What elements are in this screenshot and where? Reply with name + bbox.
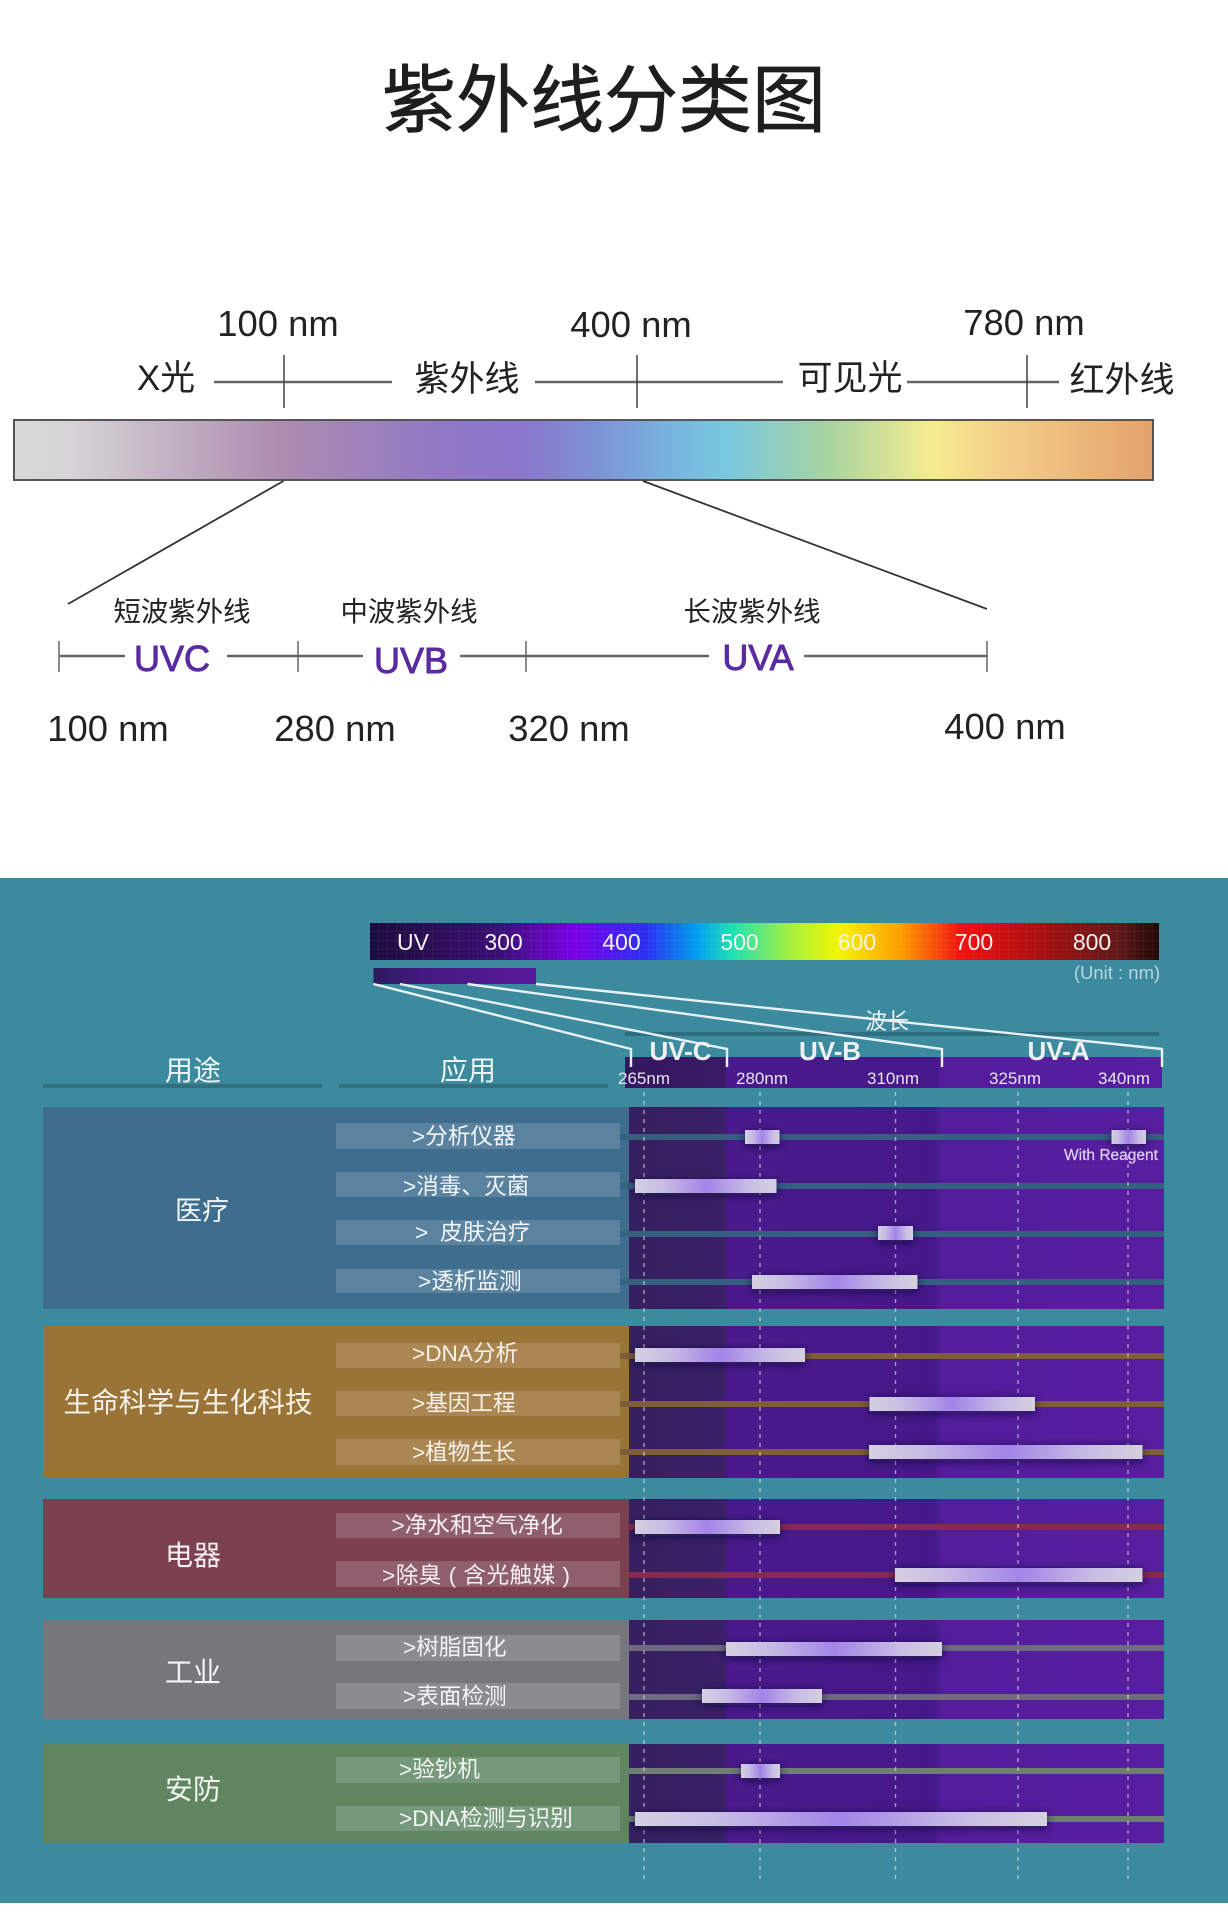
colour spectrum scale [370,923,1159,960]
title: 紫外线分类图 [382,59,826,142]
UV band Chinese names [114,596,820,627]
category: industry: 工业 [165,1657,221,1688]
category: industry: >表面检测 [403,1684,507,1709]
column heading: use: 用途 [165,1055,221,1086]
UV band headers: UV-B [799,1036,861,1066]
scale lines with ticks [214,355,1059,408]
category: electrical: >除臭 ( 含光触媒 ) [382,1563,570,1588]
band names: 红外线 [1069,361,1175,400]
column heading: use [43,1055,322,1088]
wavelength labels: 400 nm [570,304,692,345]
divider under wavelength label [625,1032,1159,1036]
header bar [625,1057,1162,1088]
wavelength ticks: 265nm [618,1069,670,1088]
category: life science: 生命科学与生化科技 [63,1387,313,1418]
category: life science: >基因工程 [412,1391,516,1416]
colour spectrum scale: 800 [1073,929,1111,955]
wavelength ticks: 280nm [736,1069,788,1088]
category: medical: 皮肤治疗 [440,1220,530,1245]
UV band wavelengths [47,706,1066,749]
colour spectrum scale: 500 [720,929,759,955]
wavelength labels [217,302,1085,345]
UV band headers: UV-A [1027,1036,1090,1066]
category: life science [43,1326,1164,1478]
UV sub-band scale [47,596,1066,749]
range bars [635,1130,1146,1826]
wavelength ticks [618,1069,1150,1088]
UV band scale line [59,641,987,672]
panel: UV applications [0,878,1228,1903]
unit note: (Unit : nm) [1074,962,1160,983]
band names: 紫外线 [414,360,520,399]
electromagnetic spectrum diagram [14,302,1175,609]
category: electrical: >净水和空气净化 [392,1513,563,1538]
colour spectrum scale: UV [397,929,430,955]
colour spectrum scale: 300 [484,929,523,955]
category: medical: 医疗 [175,1196,229,1226]
colour spectrum scale: 400 [602,929,641,955]
category: industry [43,1620,1164,1719]
UV band headers: UV-C [649,1036,712,1066]
category: security: 安防 [165,1774,221,1805]
band names: 可见光 [797,359,903,398]
category: life science: >DNA分析 [412,1341,518,1366]
column heading: application: 应用 [440,1055,496,1086]
UV band Chinese names: 短波紫外线 [114,596,250,627]
colour spectrum scale: 700 [955,929,993,955]
category: medical [43,1107,1164,1309]
category: electrical [43,1499,1164,1598]
wavelength ticks: 340nm [1098,1069,1150,1088]
UV band Chinese names: 长波紫外线 [684,596,820,627]
spectrum gradient bar [14,420,1153,480]
category: security: >验钞机 [399,1757,480,1782]
UV band codes: UVC [134,638,210,679]
wavelength ticks: 310nm [867,1069,919,1088]
zoom lines [68,481,987,609]
wavelength labels: 100 nm [217,303,339,344]
column heading: application [339,1055,608,1088]
UV band wavelengths: 100 nm [47,708,169,749]
reagent note: With Reagent [1064,1147,1159,1164]
UV band codes: UVA [722,637,794,678]
dashed wavelength guides [644,1092,1128,1880]
wavelength ticks: 325nm [989,1069,1041,1088]
band names [137,359,1175,400]
UV band codes [134,637,794,681]
band names: X光 [137,359,195,398]
category: security: >DNA检测与识别 [399,1806,573,1831]
wavelength label: 波长 [865,1009,909,1034]
category: medical: >分析仪器 [412,1124,516,1149]
category: medical: >透析监测 [418,1269,522,1294]
wavelength labels: 780 nm [963,302,1085,343]
category: medical: >消毒、灭菌 [403,1174,529,1199]
category: life science: >植物生长 [412,1440,516,1465]
UV band Chinese names: 中波紫外线 [341,596,477,627]
UV segment of the scale [374,968,536,984]
UV band wavelengths: 280 nm [274,708,396,749]
category: medical: > [415,1220,428,1245]
colour spectrum scale: 600 [838,929,876,955]
projection lines [374,984,1162,1067]
category: industry: >树脂固化 [403,1635,507,1660]
category: electrical: 电器 [165,1540,221,1571]
UV band headers [649,1036,1090,1066]
category: security [43,1744,1164,1843]
UV band wavelengths: 320 nm [508,708,630,749]
UV band codes: UVB [374,640,448,681]
UV band wavelengths: 400 nm [944,706,1066,747]
panel background [0,878,1228,1903]
